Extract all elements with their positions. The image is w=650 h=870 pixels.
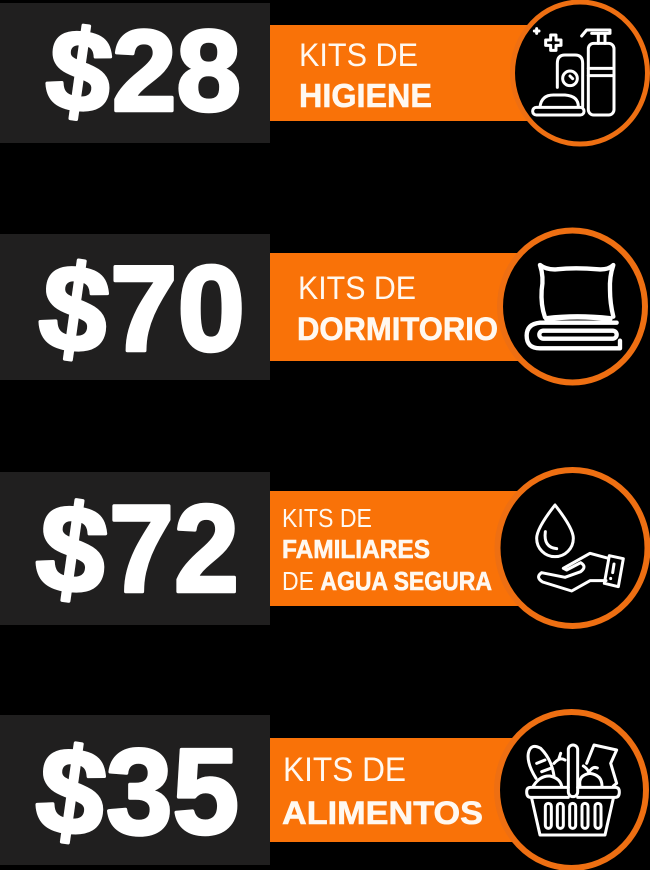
price: $72	[28, 477, 239, 623]
price: $35	[29, 720, 239, 864]
price: $28	[39, 4, 241, 140]
label: kits de higiene: KITS DE	[299, 37, 418, 73]
price: $28: $	[39, 4, 120, 140]
label: kits de familiares de agua segura: KITS DE	[282, 503, 372, 533]
label: kits de alimentos: KITS DE	[283, 751, 406, 789]
icon: grocery basket	[527, 745, 619, 835]
label: kits de dormitorio: DORMITORIO	[297, 311, 498, 347]
orange banner: hygiene	[270, 25, 540, 121]
panel: food kit row	[0, 712, 646, 868]
label: kits de familiares de agua segura: FAMILIARES	[282, 534, 430, 564]
icon: water drop over hand	[537, 505, 623, 591]
icon circle: safe water	[498, 470, 648, 626]
panel: safe water kit row	[0, 470, 648, 626]
price panel: $72	[0, 472, 270, 625]
label: kits de dormitorio	[297, 270, 498, 347]
price: $35: 35	[106, 724, 239, 860]
icon circle: bedroom	[500, 230, 645, 382]
orange banner: bedroom	[270, 253, 530, 361]
orange banner: food	[270, 738, 520, 842]
label: kits de dormitorio: KITS DE	[298, 270, 416, 306]
price: $72: $	[28, 477, 116, 623]
label: kits de higiene: HIGIENE	[299, 77, 432, 114]
orange banner: safe water	[270, 491, 530, 606]
icon: soap and bottles	[533, 29, 614, 115]
panel: bedroom kit row	[0, 230, 645, 382]
label: kits de familiares de agua segura: DE AGUA SEGURA	[282, 566, 492, 596]
panel: hygiene kit row	[0, 2, 648, 144]
price: $72: 72	[109, 480, 239, 618]
price: $70: 70	[110, 240, 245, 376]
price: $70	[32, 237, 245, 381]
price panel: $70	[0, 234, 270, 380]
icon circle: food	[497, 712, 646, 868]
price panel: $28	[0, 3, 270, 143]
price: $28: 28	[112, 8, 241, 136]
price panel: $35	[0, 715, 270, 865]
label: kits de alimentos: ALIMENTOS	[282, 795, 483, 831]
label: kits de higiene	[299, 37, 432, 114]
icon circle: hygiene	[512, 2, 648, 144]
icon: pillow and folded blanket	[527, 265, 620, 348]
price: $35: $	[29, 720, 115, 864]
label: kits de alimentos	[282, 751, 483, 831]
price: $70: $	[32, 237, 118, 381]
label: kits de familiares de agua segura	[282, 503, 492, 596]
